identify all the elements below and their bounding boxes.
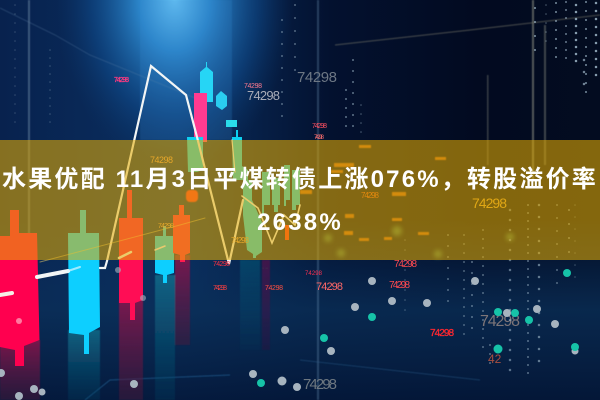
small red candle	[186, 190, 198, 202]
cyan candle 4	[155, 226, 174, 283]
red candle 3	[119, 190, 143, 320]
price labels: 74298	[114, 77, 129, 84]
price line	[0, 66, 300, 295]
tiny cyan candle	[226, 120, 237, 127]
title band	[0, 140, 600, 260]
scatter dots grey	[0, 267, 578, 400]
pink candle	[194, 93, 207, 142]
price labels: 74298	[244, 83, 262, 90]
blurred green bokeh	[324, 226, 514, 258]
price labels: 74298	[213, 261, 230, 268]
price labels: 74298	[472, 195, 507, 211]
price labels: 74298	[247, 88, 280, 103]
candle reflections	[0, 255, 270, 400]
title	[2, 166, 598, 236]
price labels: 74298	[312, 123, 327, 130]
price labels: 74298	[430, 328, 454, 339]
red candle 1	[0, 210, 40, 366]
price labels: 74298	[150, 155, 173, 165]
price labels: 74298	[231, 236, 250, 245]
orange blurred labels	[300, 145, 446, 241]
price labels: 74298	[394, 259, 417, 270]
price labels: 74298	[297, 69, 337, 86]
cyan candle 7	[232, 130, 248, 180]
price labels	[114, 69, 520, 393]
cyan candle 6	[187, 137, 203, 172]
price labels: 74298	[316, 281, 343, 293]
price labels: 74298	[303, 376, 337, 393]
price labels: 74298	[213, 285, 227, 292]
small cyan candle	[216, 91, 227, 110]
cyan candle 2	[68, 210, 100, 354]
cyan candle top	[200, 62, 213, 102]
candlesticks	[0, 62, 300, 366]
price labels: 74298	[389, 280, 410, 291]
scatter dots teal	[257, 269, 579, 387]
price labels: 74298	[480, 313, 520, 330]
price labels: 74298	[361, 191, 380, 200]
title: 2638%	[257, 209, 343, 236]
price labels: 42	[488, 352, 502, 366]
price labels: 74298	[265, 285, 283, 292]
price labels: 74298	[305, 271, 323, 277]
price labels: 74298	[158, 223, 174, 230]
cyan stepped candles	[243, 180, 262, 258]
price labels: 74298	[314, 135, 325, 141]
red candle 5	[173, 205, 190, 262]
title: 水果优配 11月3日平煤转债上涨076%，转股溢价率	[2, 166, 598, 193]
